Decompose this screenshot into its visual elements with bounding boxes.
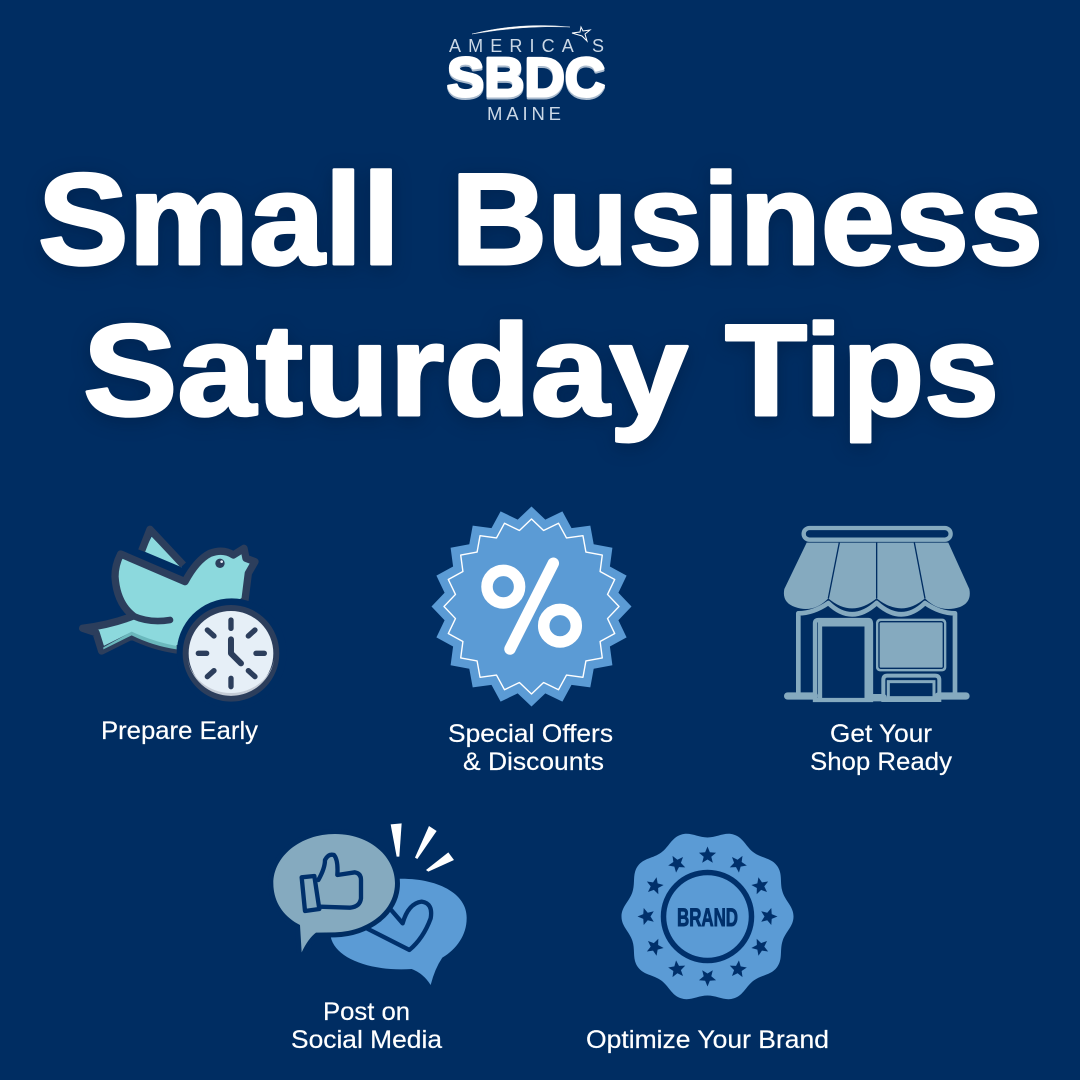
icon: brand badge: [622, 834, 794, 999]
shop planter: [883, 676, 939, 700]
seal ring: [664, 872, 752, 960]
title: [38, 146, 1043, 443]
label: Post on Social Media: [291, 998, 442, 1054]
shop top bar: [804, 528, 951, 540]
shop building: [798, 603, 955, 696]
blue speech bubble: [331, 879, 467, 985]
shop door: [815, 620, 871, 700]
title word: Tips: Tips: [725, 297, 999, 443]
badge burst: [432, 506, 632, 706]
label: Get Your Shop Ready: Shop Ready: [810, 748, 953, 776]
awning dividers: [828, 543, 925, 598]
planter inner: [888, 682, 934, 698]
shop baseline: [788, 696, 966, 698]
twelve stars: [638, 846, 778, 986]
label: Special Offers & Discounts: & Discounts: [463, 748, 604, 776]
bird eye: [215, 559, 225, 568]
label: Prepare Early: Prepare Early: [101, 717, 258, 745]
clock halo: [177, 598, 287, 708]
label: Optimize Your Brand: Optimize Your Brand: [586, 1026, 829, 1054]
wavy seal: [622, 834, 794, 999]
heart outline: [367, 902, 431, 950]
logo: America's: AMERICA S: [449, 36, 604, 56]
grey speech bubble: [273, 834, 395, 952]
window inner outline: [879, 622, 943, 668]
brand text: BRAND: [677, 904, 738, 932]
logo: America's SBDC Maine: [447, 26, 605, 124]
label: Get Your Shop Ready: [810, 720, 953, 776]
logo: SBDC: SBDC: [447, 46, 605, 108]
label: Special Offers & Discounts: [448, 720, 613, 776]
bird tail shade: [103, 632, 177, 649]
icon: bird with clock: [83, 529, 287, 708]
logo star: [572, 27, 590, 41]
white rays: [391, 823, 454, 872]
title word: Small: Small: [38, 146, 400, 292]
logo: Maine: MAINE: [487, 103, 561, 124]
shop window: [876, 619, 946, 671]
icon: percent badge: [432, 506, 632, 706]
grey bubble halo: [273, 834, 395, 952]
label: Special Offers & Discounts: Special Offers: [448, 720, 613, 748]
icon: social speech bubbles: [273, 823, 467, 985]
title word: Business: Business: [451, 146, 1043, 292]
badge inner line: [444, 519, 619, 694]
bird wing line: [133, 616, 170, 621]
label: Post on Social Media: Post on: [323, 998, 410, 1026]
label: Post on Social Media: Social Media: [291, 1026, 442, 1054]
bird upper wing: [142, 529, 183, 567]
bird body: [83, 548, 255, 651]
percent sign: [487, 563, 576, 649]
icon: shop: [784, 528, 970, 700]
label: Get Your Shop Ready: Get Your: [830, 720, 932, 748]
clock: [186, 608, 276, 699]
thumbs up: [302, 855, 361, 911]
shop awning: [784, 543, 970, 609]
logo: SBDC shadow: SBDC: [447, 48, 605, 110]
title word: Saturday: Saturday: [83, 297, 688, 443]
